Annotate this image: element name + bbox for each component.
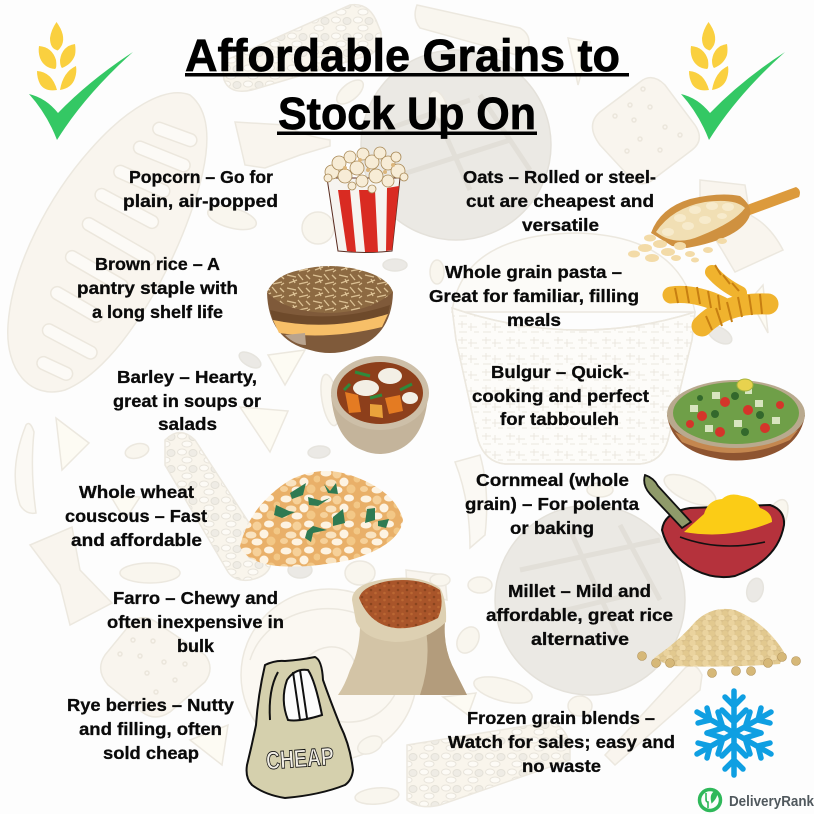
item: farro text: bulk: [177, 636, 214, 656]
item: frozen grain blends text: [448, 708, 675, 776]
item: oats text: [463, 167, 656, 235]
item: bulgur text: for tabbouleh: [500, 409, 619, 429]
left macaroni: [15, 424, 36, 513]
item: brown rice text: Brown rice – A: [95, 254, 220, 274]
icon: brown rice bowl: [267, 266, 393, 353]
item: couscous text: couscous – Fast: [65, 506, 207, 526]
triangle chips: [56, 38, 768, 765]
item: couscous text: and affordable: [71, 530, 202, 550]
item: cornmeal text: [465, 470, 639, 538]
item: millet text: affordable, great rice: [486, 605, 673, 625]
item: barley text: [113, 367, 261, 434]
item: rye berries text: and filling, often: [79, 719, 222, 739]
item: farro text: often inexpensive in: [107, 612, 284, 632]
item: frozen grain blends text: Frozen grain blends –: [467, 708, 655, 728]
item: cornmeal text: grain) – For polenta: [465, 494, 639, 514]
item: couscous text: Whole wheat: [79, 482, 194, 502]
item: whole grain pasta text: meals: [507, 310, 561, 330]
item: barley text: great in soups or: [113, 391, 261, 411]
farfalle shapes: [235, 122, 330, 168]
item: popcorn text: Popcorn – Go for: [129, 167, 273, 187]
item: popcorn text: plain, air-popped: [123, 191, 278, 211]
item: millet text: Millet – Mild and: [508, 581, 651, 601]
item: rye berries text: [67, 695, 234, 763]
dark round bread top: [361, 50, 551, 240]
item: brown rice text: pantry staple with: [77, 278, 238, 298]
icon: popcorn bucket: [324, 147, 408, 252]
item: brown rice text: a long shelf life: [92, 302, 223, 322]
icon: barley soup bowl: [331, 356, 429, 454]
item: barley text: Barley – Hearty,: [117, 367, 257, 387]
icon: cheap tote bag: [247, 657, 353, 798]
icon: farro sack: [338, 578, 467, 695]
icon: wheat and green check, left: [29, 22, 133, 140]
top right cracker: [592, 78, 699, 184]
icon: wheat and green check, right: [681, 22, 785, 140]
item: whole grain pasta text: [429, 262, 639, 330]
item: bulgur text: cooking and perfect: [472, 386, 649, 406]
item: cornmeal text: or baking: [510, 518, 594, 538]
icon: fusilli pasta: [671, 265, 768, 330]
dark round bread bottom: [495, 505, 685, 695]
basket with dome: [452, 233, 695, 464]
item: frozen grain blends text: no waste: [522, 756, 601, 776]
item: brown rice text: [77, 254, 238, 322]
item: couscous text: [65, 482, 207, 550]
title: [185, 30, 629, 139]
item: frozen grain blends text: Watch for sales; easy and: [448, 732, 675, 752]
title: Affordable Grains to: [185, 30, 620, 81]
item: whole grain pasta text: Great for familiar, filling: [429, 286, 639, 306]
baguette: [8, 93, 207, 392]
logo: DeliveryRank: [700, 790, 814, 810]
swirl bun: [241, 589, 417, 761]
item: cornmeal text: Cornmeal (whole: [476, 470, 629, 490]
item: oats text: versatile: [522, 215, 599, 235]
item: rye berries text: Rye berries – Nutty: [67, 695, 234, 715]
scattered grain ovals: [120, 76, 798, 806]
icon: millet pile: [638, 609, 800, 678]
pasta tube bottom right: [605, 665, 702, 765]
lower right grain roll: [407, 722, 570, 807]
title: Stock Up On: [278, 88, 536, 139]
item: popcorn text: [123, 167, 278, 211]
center grain roll: [165, 432, 271, 580]
icon: oats scoop: [628, 187, 800, 262]
item: bulgur text: Bulgur – Quick-: [491, 362, 629, 382]
item: farro text: [107, 588, 284, 656]
dark seeds: [237, 259, 766, 604]
item: oats text: Oats – Rolled or steel-: [463, 167, 656, 187]
item: oats text: cut are cheapest and: [466, 191, 654, 211]
top grain roll: [222, 5, 381, 91]
item: bulgur text: [472, 362, 649, 429]
macaroni mid: [455, 455, 487, 548]
icon: snowflake: [697, 691, 771, 775]
item: barley text: salads: [158, 414, 217, 434]
bag lettering: CHEAP: [265, 743, 335, 775]
item: rye berries text: sold cheap: [103, 743, 199, 763]
icon: couscous pile: [240, 471, 403, 567]
item: whole grain pasta text: Whole grain pasta –: [445, 262, 622, 282]
item: millet text: alternative: [531, 629, 629, 649]
lower left cracker: [101, 618, 210, 717]
icon: tabbouleh bowl: [667, 379, 805, 460]
icon: cornmeal bowl with spoon: [644, 475, 784, 577]
item: farro text: Farro – Chewy and: [113, 588, 278, 608]
item: millet text: [486, 581, 673, 649]
top pasta tube: [415, 5, 529, 55]
